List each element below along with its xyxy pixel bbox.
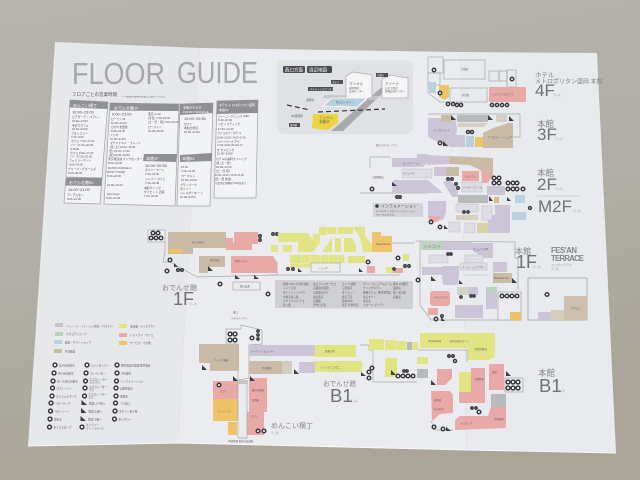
floor plan: fes'an terrace: ゲオコム [571, 306, 581, 310]
column: odense annex: おでんせ館B1 [69, 179, 95, 185]
store directory: 化粧室南口館 [283, 295, 299, 299]
column: odense 1F: ノジマ [110, 133, 119, 137]
legend: floor colours: 生活雑貨 [65, 350, 76, 354]
map heading: 周辺地図 [309, 66, 327, 74]
floor plan: odense B1 west: カフェ [251, 414, 259, 418]
store directory: クリックカラン [363, 286, 382, 290]
area map panel [277, 60, 413, 134]
store directory: 手作り交流 [313, 303, 326, 307]
legend: facility icons: 階段/上下階へ [89, 402, 106, 406]
column: odense annex: 10:00~21:00 [68, 187, 91, 192]
legend: facility icons: コインロッカー [91, 364, 110, 368]
floor plan: 3F [428, 114, 520, 148]
column: fes'an terrace: 本館2Fから3F [183, 104, 202, 110]
column: odense 1F: おかやま農産 [111, 125, 128, 129]
building: marios: 交流センター [349, 89, 365, 93]
column: menkoi yokocho: ファミリーマート [69, 158, 92, 162]
column: hotel metropolitan: 10:00~13:00 / 14:30~15:00 [215, 174, 244, 177]
building: aiina: アイーナ [385, 81, 399, 86]
store directory: 三菱東京UFJ [313, 290, 329, 294]
column: menkoi yokocho: IL DUE [70, 147, 79, 151]
information box: インフォメーション [381, 204, 417, 208]
column: fes'an terrace: ダイソー [180, 187, 191, 191]
label: 4F [535, 71, 603, 100]
column: hotel metropolitan: 10:00~13:00 [216, 165, 232, 169]
legend: facility icons: エスカレーター [90, 378, 108, 382]
column: menkoi yokocho: カフェ 7:00~17:00 [71, 139, 95, 143]
column: hotel metropolitan: 17:00~22:00 (21:00L.O.) [217, 144, 243, 147]
floor plan: odense B1 west: 惣菜入場 [325, 349, 335, 353]
building: marios: マリオス [349, 81, 363, 86]
column: menkoi yokocho: ブラッスリー [71, 132, 88, 136]
icons 4F [432, 68, 514, 107]
label: odense B1 [323, 379, 358, 406]
label: 3F: 3F [537, 125, 557, 144]
map labels [289, 73, 388, 127]
store directory: 東口ライフサービス [313, 282, 337, 286]
store directory: 第二館 [283, 303, 291, 307]
legend: floor colours: サービス・その他 [130, 341, 151, 345]
fes'an terrace heading [551, 246, 584, 271]
store directory: 民間店 [393, 286, 401, 290]
building: marios: 盛岡地域 [349, 86, 360, 90]
column: hotel metropolitan: 6:30~10:00 [218, 118, 233, 122]
floor plan: main B1: 惣菜洋食品 [475, 347, 488, 351]
legend: facility icons: 自動体温計 [120, 386, 133, 390]
label: main 1F: 1F [516, 252, 537, 272]
column: odense 1F: マクドナルド・ブレッド [110, 141, 141, 145]
store directory: 東京 学習全店 [342, 303, 359, 307]
column: odense 1F: MOON COFFEE & [108, 166, 132, 170]
floor plan: main B1: 串焼 [492, 370, 497, 374]
floor plan: main 1F: ファッションプラザ [462, 265, 484, 269]
column: odense 1F: 10:00~22:00 [111, 121, 127, 125]
label: main B1 [538, 368, 565, 396]
legend: floor colours: スウェアショップ [66, 332, 87, 336]
column: odense 1F: New Days [107, 192, 120, 196]
floor plan: odense B1 west: 生活雑貨 [262, 366, 272, 370]
legend: facility icons: エレベーター [90, 372, 106, 376]
store directory: ライツ 盛岡 [342, 282, 356, 286]
floor plan: odense B1 west: 東口 [233, 310, 238, 314]
label: main B1: 本館 [538, 368, 556, 378]
column: odense annex: 8:00~21:00 [67, 197, 82, 201]
map heading [283, 66, 332, 74]
column: main building 1F sub: 本館1F [146, 155, 159, 161]
legend: facility icons: オストメイト [56, 386, 72, 390]
building: aiina: いわて県民 [385, 86, 398, 90]
column: menkoi yokocho: クリーニングホームズ [68, 167, 96, 171]
column: fes'an terrace: FES'AN TERRACE [183, 110, 209, 114]
column: menkoi yokocho [66, 100, 108, 178]
divider [537, 195, 579, 197]
map labels: 大通り [377, 73, 384, 77]
legend: floor colours: 食料品・ティクアウト [130, 324, 156, 328]
hours heading: ※一部店舗の営業時間は変更になる場合がございます。 [122, 94, 167, 98]
label: odense 1F: おでんせ館 [162, 283, 197, 292]
yellow station: フェザン [319, 115, 333, 120]
floor plan: 2F: ハッピーファーム [463, 185, 483, 189]
road [331, 87, 387, 131]
legend: facility icons: 階段/上層へ [88, 410, 103, 414]
column: menkoi yokocho: カフェ 8:00~17:00 [70, 151, 94, 155]
hours heading [72, 91, 167, 98]
floor plan: main B1: ヨーロッパ [460, 421, 473, 425]
floor plan: M2F [428, 195, 531, 233]
legend: facility icons: JRE銀行 [121, 372, 131, 376]
title: GUIDE [177, 55, 258, 90]
floor plan: odense 1F center [270, 227, 415, 275]
column: hotel metropolitan: ジャーニー ダイニング JUEN [218, 114, 250, 118]
column: menkoi yokocho: 6:00~24:00 [69, 162, 84, 166]
floor plan: odense 1F center: Sweet Dance [376, 243, 391, 246]
column: main building 1F sub [143, 154, 177, 198]
floor plan: main 1F: マルイ カフェ [434, 295, 450, 299]
column: hotel metropolitan: 10:00~19:00 [217, 152, 233, 156]
floor plan: odense 1F west: おらが屋台 [192, 240, 205, 244]
title: FLOOR [72, 56, 165, 91]
legend: facility icons: アートスペース [86, 426, 104, 430]
column: fes'an terrace: 7:00~21:00 [181, 169, 196, 173]
floor plan: odense B1 west [199, 310, 362, 443]
floor plan: odense B1 west: 居酒屋 [252, 398, 260, 402]
legend: facility icons: 上り/下り [90, 380, 101, 384]
legend: facility icons: 喫煙所 [120, 394, 128, 398]
hours table [64, 100, 258, 206]
floor plan: 4F: 宴会場 [462, 93, 470, 97]
legend: facility icons: 下り [89, 388, 95, 392]
column: fes'an terrace: ブランパーク [180, 183, 197, 187]
legend: floor colours: ファッション・ファッション雑貨・アクセサリー [66, 324, 114, 328]
legend: facility icons: エンジェルマーク [56, 394, 77, 398]
column: odense 1F: [平日] 7:00~23:00 [148, 116, 170, 120]
store directory: 動物カフェ / 携帯専門店 [363, 290, 392, 294]
label: menkoi yokocho [271, 421, 313, 435]
column: odense 1F: [土・日・祝] 7:00~21:00 [148, 120, 179, 124]
map labels: 盛岡の [306, 98, 315, 102]
column: hotel metropolitan [214, 100, 258, 198]
map labels: 盛岡駅 [290, 123, 298, 127]
column: hotel metropolitan: [日・祝 休診] [215, 177, 232, 181]
column: main building 1F sub: 本館クイック [144, 186, 161, 190]
label: menkoi yokocho: めんこい横丁 [271, 421, 313, 430]
column: menkoi yokocho: 7:00~9:00 [71, 135, 84, 139]
column: hotel metropolitan: 11:30~14:30 [218, 127, 234, 131]
column: fes'an terrace: ロフト [184, 122, 193, 126]
store directory: 交番店 [393, 295, 401, 299]
floor plan: 2F: ロックブリッジ [403, 161, 420, 165]
label: M2F: ①~④ [573, 208, 581, 213]
floor plan: 2F: 西口ペデストリアン [376, 143, 398, 147]
label: odense 1F: ①~④ [189, 301, 197, 306]
column: hotel metropolitan: カフェ&バーホテル [217, 131, 241, 135]
label: odense B1: ①~④ [350, 398, 358, 403]
floor plan: main B1: 海鮮居 [434, 398, 442, 402]
store directory: ダイエット [342, 290, 355, 294]
label: menkoi yokocho: ①~⑨ [271, 430, 279, 435]
hours heading: フロアごとの営業時間 [72, 91, 117, 98]
store directory: フロール ガーデン [363, 303, 385, 307]
floor plan: odense 1F west [148, 230, 278, 296]
floor plan: main 1F [416, 241, 521, 321]
floor plan: main B1: お好み焼きカフェ [450, 339, 470, 343]
yellow station [312, 114, 338, 130]
column: odense 1F [104, 103, 179, 206]
column: odense 1F: [祝] 10:00~19:00 [109, 153, 130, 157]
store directory: 無料 SUIT 大手町東館 [283, 282, 309, 286]
floor plan: odense 1F west: 食事 / カフェ [235, 259, 250, 263]
store directory: ダーリントンヤマト [283, 290, 307, 294]
label: odense B1: おでんせ館 [323, 379, 356, 388]
floor plan: fes'an terrace [528, 278, 587, 320]
floor plan: odense 1F west: 東口交通 [240, 284, 250, 288]
legend: floor colours: 雑貨・ギフトショップ [65, 340, 91, 344]
legend: facility icons: エスカレーター [88, 392, 107, 396]
column: hotel metropolitan: ※受付は診療終了30分前まで [215, 181, 247, 185]
column: menkoi yokocho: バー 17:30~22:00 [70, 154, 92, 158]
column: odense 1F: 8:30~22:00 [107, 174, 122, 178]
floor plan: odense 1F west: 無印良品 [210, 258, 220, 262]
legend: facility icons [48, 363, 151, 430]
legend: facility icons: 授乳室 [54, 418, 62, 422]
floor plan: 2F: レストラン [464, 174, 477, 178]
floor plan: main 1F: Weekend Tea [494, 277, 509, 280]
legend: facility icons: 携帯電話充電器/携帯電話 [121, 364, 151, 368]
fes'an terrace heading: フェザンテラス [551, 262, 572, 267]
column: hotel metropolitan: ホテルメトロポリタン盛岡 [219, 102, 255, 107]
column: fes'an terrace: ジャルダーネ 一ぐ [180, 191, 203, 195]
store directory: マクドナルド ナゴ [283, 299, 305, 303]
legend: facility icons: 車いすカー [118, 418, 132, 422]
label: 3F: 本館 [537, 119, 555, 129]
legend: facility icons: 上り [88, 396, 94, 400]
railway [287, 105, 385, 112]
building: marios [346, 72, 372, 98]
column: odense 1F: 東京 Cook [148, 112, 162, 116]
store directory: 貸切ATM [342, 299, 352, 303]
column: main building 1F sub: 7:00~23:00 [145, 172, 160, 176]
floor plan: odense B1 west: JR盛岡駅 東西自由通路 [228, 439, 254, 443]
floor plan: main B1 [360, 333, 523, 431]
information box: TEL 019-624-7025 [376, 214, 395, 216]
fes'an terrace heading: TERRACE [551, 254, 584, 263]
information box [373, 203, 423, 217]
floor plan: odense B1 west: ハリウッド ビューティ [251, 349, 275, 353]
label: odense 1F [162, 283, 197, 309]
column: odense 1F: 東京靴流通 ブックセンター [108, 157, 143, 161]
column: odense 1F: 10:00~20:30 [148, 129, 164, 133]
floor plan: 4F: 会議室 [461, 67, 469, 71]
legend: facility icons: 階段/下層へ [88, 418, 102, 422]
fes'an terrace heading: ①~③ [551, 266, 559, 271]
column: fes'an terrace: 本館の全店 [184, 126, 198, 130]
store directory: 交番館 [313, 299, 321, 303]
store directory: 三菱東京 [342, 286, 353, 290]
store directory [275, 280, 413, 309]
column: fes'an terrace: 10:00 [181, 165, 188, 169]
legend: facility icons: 男子用化粧室 [58, 372, 74, 376]
label: odense B1: B1 [330, 385, 353, 406]
column: main building 1F sub: ジャパン カフェ [145, 177, 166, 181]
floor plan: odense B1 west: ペデストリアン [231, 316, 248, 320]
column: odense annex: アンデルセン [67, 193, 84, 197]
legend: floor colours [54, 323, 156, 354]
column: odense 1F: [日] 10:00~17:00 [109, 149, 130, 153]
store directory: 東京店 [363, 299, 371, 303]
floor plan: main B1: Timesharing [428, 340, 442, 343]
column: fes'an terrace: カーマルト [181, 174, 195, 178]
column: odense 1F: 10:00~20:30 [107, 183, 123, 187]
column: hotel metropolitan: ホテルの歯科クリニック [216, 157, 247, 161]
column: odense 1F: ROST STAND [107, 170, 125, 174]
column: fes'an terrace: 10:00~20:30 [184, 116, 207, 121]
fes'an terrace heading: FES'AN [551, 246, 577, 255]
label: 3F: ①~④ [555, 136, 563, 141]
column: fes'an terrace: 10:00~22:00 [180, 195, 196, 199]
legend: floor colours: レストラン・カフェ [130, 333, 154, 337]
map heading: 西口方面 [285, 66, 303, 74]
column: hotel metropolitan: ザ カシピング [217, 148, 235, 152]
label: 2F [537, 168, 563, 194]
legend: facility icons: ギャラリー [86, 423, 99, 427]
column: menkoi yokocho: 10:00~23:00 [72, 119, 88, 123]
column: odense 1F: 9:00~21:00 [112, 112, 132, 116]
store directory: 東京サイト [363, 295, 376, 299]
label: main 1F: 本館 [515, 246, 531, 256]
store directory: 第一宿り館 [393, 290, 406, 294]
floor plan: odense B1 west: ファッション [217, 409, 232, 413]
column: main building 1F sub: ダイソーマート [145, 168, 165, 172]
label: 4F: メトロポリタン盛岡 本館 [535, 78, 603, 86]
label: main 1F: ①~④ [533, 264, 541, 269]
store directory: 携帯 PC銀行 [393, 282, 408, 286]
floor plan: odense B1 west: カフェ [220, 389, 228, 393]
floor plan: odense B1 west: ドラッグ コンビニ [321, 365, 341, 369]
legend: facility icons: ベビーキープ [55, 402, 71, 406]
label: 4F: 4F [535, 81, 555, 100]
column: main building 1F sub: 7:00~22:40 [144, 194, 159, 198]
store directory: ゲイン カジュアルホーム [363, 282, 392, 286]
column: fes'an terrace: 10:00~22:00 [181, 178, 197, 182]
floor plan: 2F: カジュアル [403, 171, 415, 175]
column: main building 1F sub: ダイエット 店舗 [144, 190, 165, 194]
building: aiina [382, 75, 408, 98]
column: menkoi yokocho: 10:00~22:00 [72, 127, 88, 131]
store directory: 東田南店 [313, 295, 324, 299]
legend: facility icons: バス出口 [120, 402, 130, 406]
legend: facility icons: 女子用化粧室 [59, 364, 75, 368]
column: hotel metropolitan: [土・日 祝] [216, 169, 230, 173]
label: M2F: M2F [538, 197, 572, 216]
floor plan: 3F: バラエティ・ショップ [488, 135, 512, 139]
floor plan: main B1: 中華料理 [474, 377, 484, 381]
floor plan: odense B1 west: アメリカ雑貨 [214, 358, 229, 362]
column: odense 1F: ローソン1F [111, 117, 126, 121]
title [72, 55, 258, 91]
legend: facility icons: 車イススロープ [54, 426, 72, 430]
floor plan: odense B1 west: 番の居酒屋 [252, 388, 265, 392]
column: hotel metropolitan: ジャーペーナ カイ [217, 140, 240, 144]
legend: facility icons: インフォメーション [120, 380, 144, 384]
information box: 4F JOJOB フェザンインフォメーション [376, 209, 415, 213]
legend: facility icons: ベビーシート [54, 410, 70, 414]
legend: facility icons: 車イス対応化粧室 [57, 380, 78, 384]
column: menkoi yokocho: ビアガーデン ベアレン [72, 115, 101, 119]
map labels: ホテル [332, 80, 340, 84]
column: odense 1F: 6:00~22:00 [106, 196, 121, 200]
label: odense 1F: 1F [173, 289, 194, 309]
map labels: JR盛岡駅 [291, 114, 303, 118]
floor plan: main B1: 中華料理 [494, 417, 504, 421]
column: main building 1F sub: 7:30~22:00 [145, 181, 160, 185]
blue plaza: 西口ロータリー [336, 100, 354, 104]
yellow station: 本館3F [319, 119, 330, 124]
floor plan: main 1F: コンビニエンス [424, 244, 441, 248]
floor plan: 2F [360, 143, 525, 198]
legend: facility icons: タクシー乗り場 [119, 410, 138, 414]
map labels: ホテルメトロポリタン [310, 87, 335, 91]
floor plan: 3F: ノーブルバンド [433, 128, 450, 132]
floor plan: 4F [428, 57, 526, 107]
floor plan: 4F: レストラン＆カフェ [492, 92, 514, 96]
legend: facility icons: エスカレーター [89, 385, 108, 389]
column: hotel metropolitan: ハピノスティック [218, 122, 240, 126]
store directory: 京都府の民間 [313, 286, 329, 290]
label: main 1F [515, 246, 541, 272]
column: main building 1F sub: 10:00~20:30 [145, 163, 168, 168]
column: menkoi yokocho: 8:00~20:00 [68, 171, 83, 175]
label: 2F: 本館 [537, 168, 555, 178]
column: menkoi yokocho: 手作りカフェ [72, 124, 89, 128]
column: fes'an terrace: 10:00~21:00 [184, 130, 200, 134]
column: odense 1F: [月~土] 10:00~19:00 [110, 145, 136, 149]
column: fes'an terrace: 本館B1 [182, 155, 196, 161]
building: aiina: 情報交流センター [385, 89, 406, 93]
column: odense 1F: おでんせ館1F [114, 104, 139, 110]
label: 4F: ①~④ [553, 92, 561, 97]
column: odense 1F: 9:00~21:00 [111, 129, 126, 133]
label: 4F: ホテル [535, 71, 555, 79]
label: 2F: ①~④ [555, 186, 563, 191]
column: menkoi yokocho: バー 17:00~22:00 [71, 143, 93, 147]
column: hotel metropolitan: [月~土・祝] [216, 161, 231, 165]
column: odense 1F: 10:00~21:00 [110, 137, 126, 141]
paper sheet [28, 42, 616, 453]
floor plan: odense 1F center: ショップ [318, 266, 328, 270]
label: main B1: B1 [539, 375, 562, 396]
floor plan: main B1: おみやげ [434, 407, 444, 411]
column: odense 1F: ローストン [148, 125, 162, 129]
label: 3F [537, 119, 563, 144]
floor plan: main 1F: カジュアルMK [473, 247, 489, 251]
column: odense 1F: 8:00~22:00 [108, 161, 123, 165]
label: 2F: 2F [537, 175, 557, 194]
store directory: シャツ工房 [283, 286, 296, 290]
floor plan: 2F: 大通連絡口 [372, 175, 385, 179]
column: menkoi yokocho: めんこい横丁 [73, 102, 97, 108]
store directory: 東京工芸 [342, 295, 353, 299]
column: odense annex [64, 178, 102, 204]
column: fes'an terrace [177, 103, 213, 206]
column: hotel metropolitan: 本館4F [219, 107, 229, 112]
label: main B1: ①~④ [557, 388, 565, 393]
column: hotel metropolitan: 10:00~21:00 / 14:00~17:00 [217, 136, 246, 140]
column: menkoi yokocho: 10:00~23:00 [72, 110, 95, 114]
